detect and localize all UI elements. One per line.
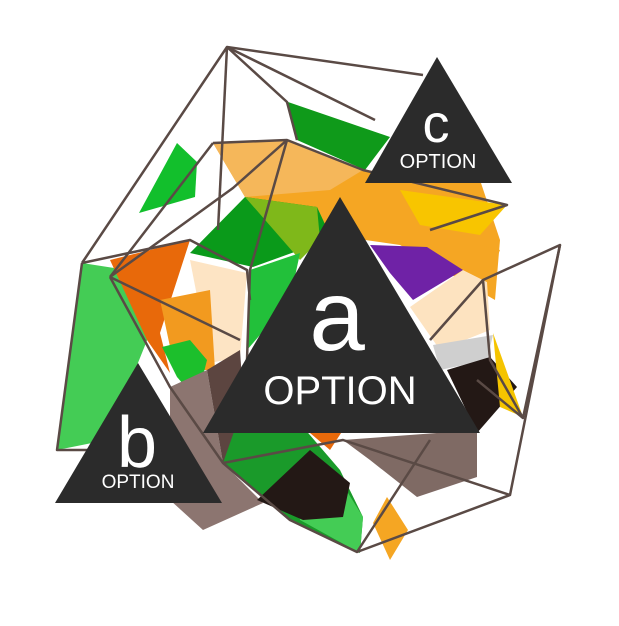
option c triangle (365, 57, 512, 183)
option b triangle: b (117, 403, 157, 483)
option b triangle (55, 363, 222, 503)
option c triangle: OPTION (400, 151, 476, 173)
wireframe (57, 47, 560, 552)
colored polygon cluster (57, 102, 523, 560)
option a triangle (203, 197, 480, 433)
option a triangle: OPTION (263, 369, 417, 413)
option b triangle: OPTION (102, 472, 174, 493)
option a triangle: a (309, 260, 365, 372)
option c triangle: c (422, 94, 450, 154)
